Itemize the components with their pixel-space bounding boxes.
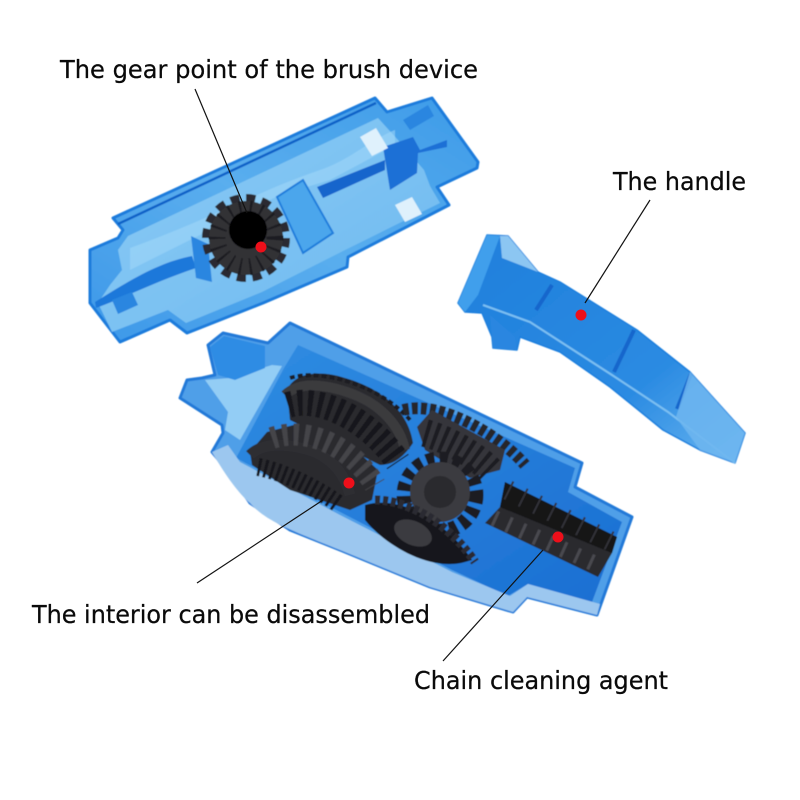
leader line: [197, 500, 323, 583]
tray outline: [90, 98, 478, 342]
label: The handle: [612, 167, 746, 196]
pale corner: [205, 365, 282, 440]
tray body: [180, 323, 632, 615]
icon: bevel gear: [207, 199, 285, 277]
lower spur gear: [404, 459, 476, 531]
handle body: [458, 235, 745, 463]
interior cavity: [236, 345, 622, 602]
bottom wheel: [365, 500, 475, 564]
callout: interior: [31, 478, 430, 629]
panel: open upper tray: [90, 98, 478, 342]
label: The gear point of the brush device: [59, 55, 478, 84]
inner floor: [98, 118, 440, 332]
upper brush wheel: [285, 374, 413, 465]
panel: lower tray with gears: [180, 323, 632, 615]
panel: handle: [458, 235, 745, 463]
red dot: [344, 478, 354, 488]
label: The interior can be disassembled: [31, 600, 430, 629]
leader line: [443, 550, 543, 661]
lower brush wheel: [250, 422, 378, 510]
callout: gear point: [59, 55, 478, 252]
upper bevel gear: [403, 408, 525, 478]
red dot: [576, 310, 586, 320]
leader line: [195, 89, 247, 213]
leader line: [585, 200, 650, 303]
callout: handle: [576, 167, 746, 320]
red dot: [256, 242, 266, 252]
label: Chain cleaning agent: [414, 666, 668, 695]
callout: chain cleaning agent: [414, 532, 668, 695]
central rail: [317, 160, 385, 198]
red dot: [552, 532, 564, 542]
front wall: [212, 445, 600, 615]
chain cleaning sponge block: [485, 482, 617, 577]
